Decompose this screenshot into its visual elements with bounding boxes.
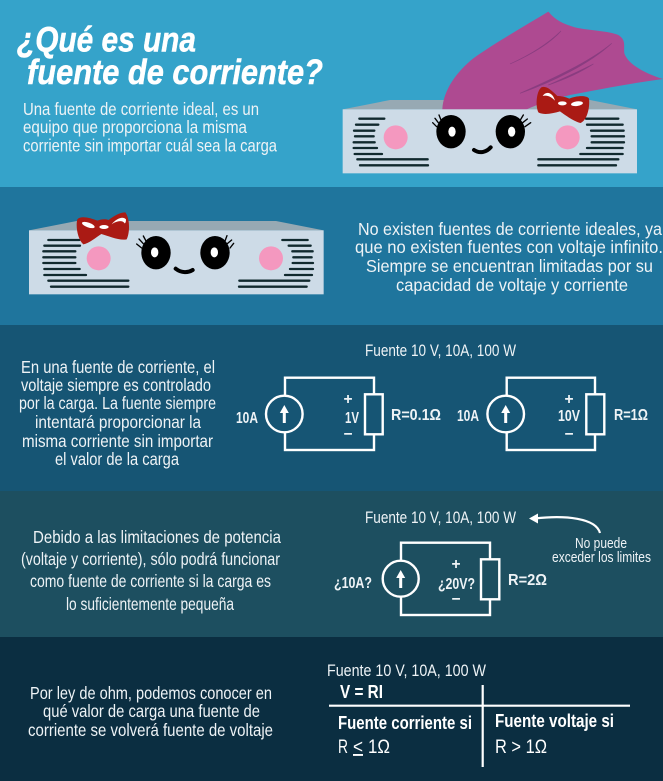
- text: voltage controlled: por la carga. La fuente siempre: [19, 393, 216, 413]
- text: power limits: como fuente de corriente si la carga es: [30, 571, 271, 591]
- label: source rating: Fuente 10 V, 10A, 100 W: [365, 341, 516, 360]
- intro text: [23, 99, 277, 156]
- table: source mode conditions: R > 1Ω: [495, 737, 547, 758]
- arrow: to source rating: [529, 514, 600, 533]
- panel: power limits: [0, 491, 663, 637]
- circuit: 1 ohm load: 10V: [558, 408, 581, 425]
- circuit: tenth ohm load: [236, 378, 441, 450]
- intro text: Una fuente de corriente ideal, es un: [23, 99, 259, 119]
- circuit: 1 ohm load: +: [564, 391, 574, 408]
- text: ohm law: Por ley de ohm, podemos conocer en: [30, 683, 272, 703]
- circuit: tenth ohm load: +: [343, 391, 353, 408]
- circuit: 2 ohm load: +: [451, 556, 461, 573]
- title: fuente de corriente?: [27, 53, 323, 92]
- circuit: 1 ohm load: −: [564, 426, 574, 443]
- text: power limits: lo suficientemente pequeña: [66, 594, 234, 614]
- text: power limits: [21, 527, 281, 614]
- note: cannot exceed limits: No puede: [575, 535, 627, 552]
- circuit: tenth ohm load: R=0.1Ω: [391, 407, 441, 424]
- text: power limits: (voltaje y corriente), sólo podrá funcionar: [21, 549, 280, 569]
- table: source mode conditions: R: [338, 737, 348, 758]
- panel: voltage controlled: [0, 325, 663, 491]
- text: no ideal sources: capacidad de voltaje y corriente: [396, 275, 628, 295]
- illustration: power supply with bow: [29, 212, 324, 294]
- circuit: 2 ohm load: R=2Ω: [508, 572, 547, 589]
- circuit: tenth ohm load: 10A: [236, 410, 258, 427]
- illustration: power supply with cape: [343, 12, 663, 173]
- circuit: 1 ohm load: 10A: [457, 408, 479, 425]
- table: source mode conditions: [329, 681, 630, 767]
- label: source rating: Fuente 10 V, 10A, 100 W: [327, 661, 486, 680]
- title: ¿Qué es una: [17, 20, 196, 60]
- circuit: 2 ohm load: ¿20V?: [438, 576, 475, 593]
- text: no ideal sources: [355, 219, 663, 295]
- circuit: 2 ohm load: [334, 543, 547, 615]
- text: voltage controlled: voltaje siempre es controlado: [21, 375, 211, 395]
- title: [17, 20, 323, 92]
- table: source mode conditions: Fuente voltaje si: [495, 710, 614, 731]
- note: cannot exceed limits: [552, 535, 651, 566]
- panel: ohm law: [0, 637, 663, 781]
- intro text: equipo que proporciona la misma: [23, 117, 247, 137]
- circuit: tenth ohm load: −: [343, 426, 353, 443]
- text: voltage controlled: En una fuente de corriente, el: [21, 357, 215, 377]
- text: ohm law: qué valor de carga una fuente de: [43, 701, 260, 721]
- circuit: 1 ohm load: [457, 378, 648, 450]
- table: source mode conditions: <: [353, 737, 363, 758]
- text: voltage controlled: [19, 357, 216, 469]
- circuit: 2 ohm load: ¿10A?: [334, 575, 372, 592]
- circuit: 2 ohm load: −: [451, 591, 461, 608]
- text: ohm law: corriente se volverá fuente de voltaje: [28, 720, 273, 740]
- label: source rating: Fuente 10 V, 10A, 100 W: [365, 508, 516, 527]
- table: source mode conditions: Fuente corriente si: [338, 712, 472, 733]
- panel: intro: [0, 0, 663, 187]
- circuit: tenth ohm load: 1V: [345, 410, 359, 427]
- table: source mode conditions: 1Ω: [368, 737, 390, 758]
- text: voltage controlled: intentará proporcionar la: [35, 412, 201, 432]
- text: voltage controlled: misma corriente sin importar: [22, 431, 213, 451]
- text: voltage controlled: el valor de la carga: [55, 449, 179, 469]
- circuit: 1 ohm load: R=1Ω: [614, 407, 648, 424]
- panel: no ideal sources: [0, 187, 663, 325]
- text: power limits: Debido a las limitaciones de potencia: [33, 527, 281, 547]
- table: source mode conditions: V = RI: [340, 681, 383, 702]
- text: ohm law: [28, 683, 273, 740]
- intro text: corriente sin importar cuál sea la carga: [23, 136, 277, 156]
